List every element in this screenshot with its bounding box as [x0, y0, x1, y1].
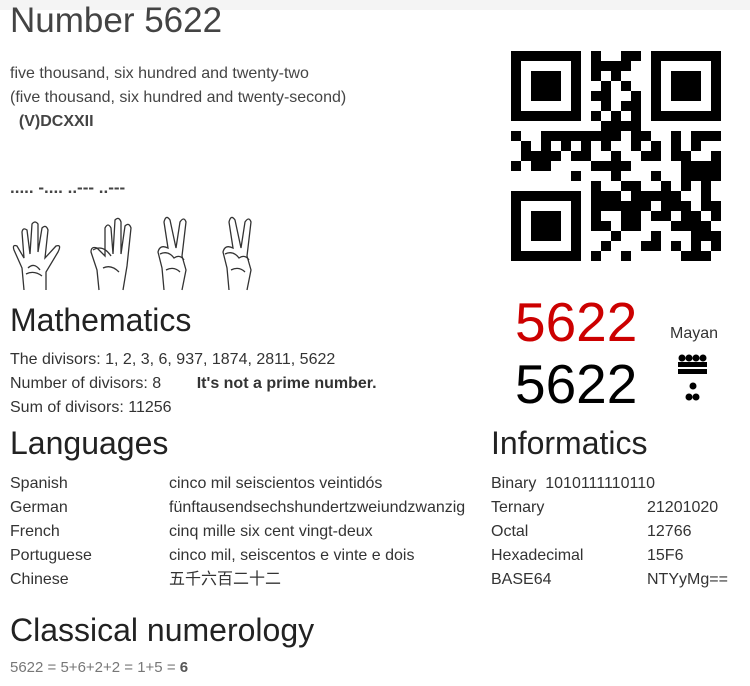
big number black: 5622	[515, 353, 637, 415]
table: informatics: Octal	[491, 523, 528, 540]
table: informatics: 21201020	[647, 499, 718, 516]
table: languages: German	[10, 499, 68, 516]
title: Number 5622	[10, 1, 222, 40]
text block: names: (V)DCXXII	[19, 113, 94, 130]
text block: math facts: Sum of divisors: 11256	[10, 399, 172, 416]
table: languages: French	[10, 523, 60, 540]
morse: ..... -.... ..--- ..---	[10, 178, 125, 197]
table: informatics: Binary 1010111110110	[491, 475, 655, 492]
table: informatics: 12766	[647, 523, 692, 540]
heading: Classical numerology: Classical numerology	[10, 612, 314, 648]
text block: math facts: The divisors: 1, 2, 3, 6, 937, 1874, 2811, 5622	[10, 351, 335, 368]
table: informatics: Ternary	[491, 499, 544, 516]
heading: Languages: Languages	[10, 425, 168, 461]
icon: hands	[12, 216, 252, 290]
top band	[0, 0, 750, 10]
big number red: 5622	[515, 291, 637, 353]
table: languages: 五千六百二十二	[169, 571, 281, 588]
table: languages: Spanish	[10, 475, 68, 492]
table: informatics: 15F6	[647, 547, 683, 564]
text block: math facts: Number of divisors: 8 It's not a prime number.	[10, 375, 377, 392]
text block: names: five thousand, six hundred and twenty-two	[10, 65, 309, 82]
table: informatics	[491, 475, 728, 588]
text block: math facts	[10, 351, 377, 416]
QR code	[511, 51, 721, 261]
text block: names	[10, 65, 346, 130]
table: languages: cinco mil seiscientos veintidós	[169, 475, 382, 492]
table: languages: cinco mil, seiscentos e vinte e dois	[169, 547, 414, 564]
heading: Mathematics: Mathematics	[10, 302, 191, 338]
table: languages: cinq mille six cent vingt-deux	[169, 523, 373, 540]
text: numerology: 5622 = 5+6+2+2 = 1+5 = 6	[10, 659, 188, 676]
table: informatics: NTYyMg==	[647, 571, 728, 588]
table: languages	[10, 475, 465, 588]
table: languages: Portuguese	[10, 547, 92, 564]
icon: mayan numeral	[678, 354, 707, 400]
text block: names: (five thousand, six hundred and twenty-second)	[10, 89, 346, 106]
table: informatics: Hexadecimal	[491, 547, 583, 564]
table: languages: fünftausendsechshundertzweiundzwanzig	[169, 499, 465, 516]
table: languages: Chinese	[10, 571, 69, 588]
table: informatics: BASE64	[491, 571, 551, 588]
Mayan label: Mayan	[670, 325, 718, 342]
heading: Informatics: Informatics	[491, 425, 647, 461]
